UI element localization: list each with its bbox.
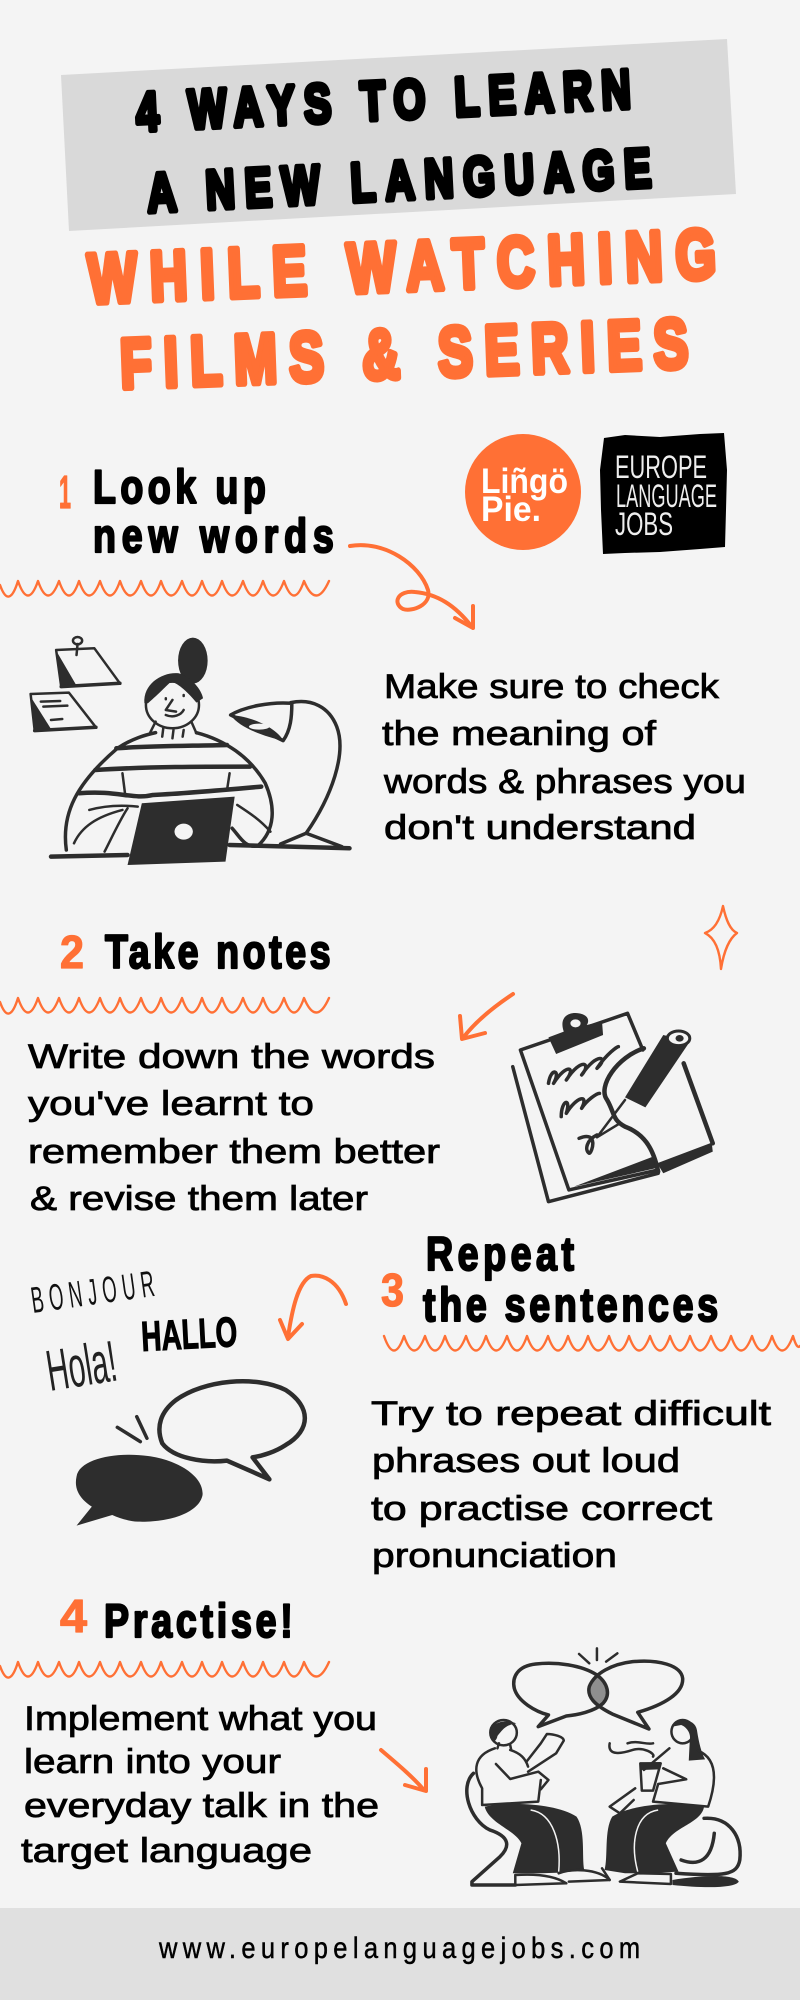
arrow 4	[381, 1750, 426, 1791]
illustration: woman with laptop and lamp	[31, 637, 349, 865]
logo: Lingo Pie: Pie.	[481, 490, 541, 529]
text block 2	[28, 1038, 440, 1218]
heading 3: repeat the sentences: the sentences	[423, 1279, 718, 1332]
heading 1: look up new words	[59, 461, 334, 563]
text block 1: don't understand	[384, 809, 696, 847]
heading 2: take notes: Take notes	[105, 926, 331, 979]
greeting words	[29, 1264, 238, 1404]
text block 4: everyday talk in the	[24, 1787, 379, 1825]
text block 2: & revise them later	[30, 1180, 368, 1218]
logo: Lingo Pie: Liñgö	[481, 462, 568, 501]
orange subtitle	[86, 215, 717, 404]
illustration: clipboard and hand writing	[513, 1013, 713, 1202]
orange subtitle: FILMS & SERIES	[119, 305, 690, 404]
footer: www.europelanguagejobs.com	[158, 1931, 640, 1964]
footer	[0, 1908, 800, 2000]
logo: Europe Language Jobs: LANGUAGE	[616, 478, 717, 514]
text block 3: phrases out loud	[372, 1442, 680, 1480]
title banner: A NEW LANGUAGE	[146, 138, 653, 224]
greeting words: BONJOUR	[29, 1264, 157, 1322]
title banner: 4 WAYS TO LEARN	[135, 59, 632, 143]
heading 3: repeat the sentences: Repeat	[426, 1228, 574, 1281]
text block 2: Write down the words	[28, 1038, 435, 1076]
text block 4	[21, 1700, 379, 1870]
heading 1: look up new words: 1	[59, 466, 71, 518]
title banner	[61, 39, 736, 231]
heading 1: look up new words: Look up	[93, 461, 266, 514]
heading 1: look up new words: new words	[93, 510, 334, 563]
illustration: two people talking over coffee	[467, 1648, 740, 1887]
text block 3: Try to repeat difficult	[371, 1395, 772, 1433]
decorative star	[705, 906, 737, 969]
heading 2: take notes: 2	[60, 926, 84, 978]
text block 3: pronunciation	[372, 1537, 617, 1575]
text block 1	[382, 668, 746, 847]
text block 1: words & phrases you	[383, 763, 746, 801]
text block 4: learn into your	[24, 1743, 281, 1781]
arrow 1	[350, 545, 473, 628]
heading 3: repeat the sentences	[381, 1228, 718, 1332]
text block 3: to practise correct	[371, 1490, 713, 1528]
wavy underline 1	[0, 581, 329, 597]
logo: Europe Language Jobs: JOBS	[615, 506, 673, 542]
text block 2: remember them better	[28, 1133, 440, 1171]
logo: Europe Language Jobs	[600, 433, 727, 554]
illustration: speech bubbles	[76, 1381, 305, 1526]
logo: Europe Language Jobs: EUROPE	[615, 449, 707, 485]
wavy underline 3	[384, 1336, 800, 1350]
arrow 2	[460, 994, 513, 1039]
logo: Lingo Pie	[465, 434, 581, 550]
wavy underline 4	[0, 1662, 329, 1678]
heading 3: repeat the sentences: 3	[381, 1264, 404, 1316]
text block 1: the meaning of	[382, 715, 657, 753]
text block 1: Make sure to check	[384, 668, 720, 706]
text block 3	[371, 1395, 772, 1575]
wavy underline 2	[0, 998, 329, 1014]
greeting words: HALLO	[140, 1308, 238, 1360]
arrow 3	[280, 1276, 346, 1339]
greeting words: Hola!	[42, 1329, 121, 1404]
heading 4: practise: Practise!	[104, 1595, 293, 1648]
orange subtitle: WHILE WATCHING	[86, 215, 717, 319]
text block 4: Implement what you	[24, 1700, 377, 1738]
text block 2: you've learnt to	[28, 1085, 314, 1123]
heading 4: practise: 4	[60, 1590, 87, 1642]
text block 4: target language	[21, 1832, 312, 1870]
